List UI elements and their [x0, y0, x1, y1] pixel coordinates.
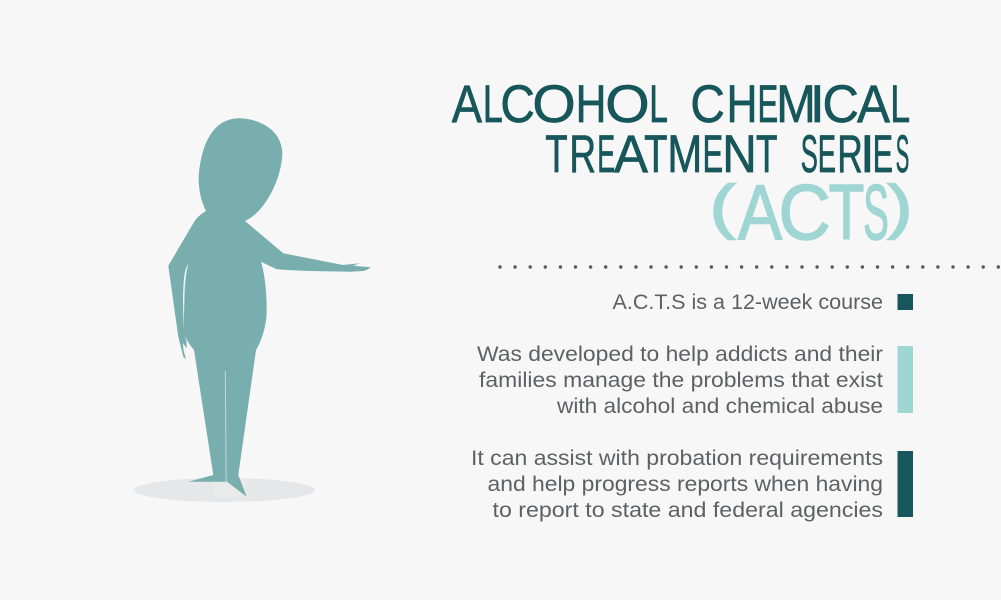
text: S: [896, 125, 909, 184]
item 3 text: to report to state and federal agencies: [492, 499, 883, 522]
title line 1: H: [576, 75, 606, 134]
title line 1: A: [857, 75, 891, 134]
title line 2: S: [801, 125, 818, 184]
person silhouette: [168, 118, 371, 497]
title line 1: L: [483, 75, 503, 134]
gap between legs: [224, 371, 227, 482]
title line 2: T: [644, 125, 668, 184]
title line 2: E: [873, 125, 893, 184]
title line 2: I: [860, 125, 875, 184]
item 2 text: with alcohol and chemical abuse: [556, 395, 883, 418]
item 3 text: It can assist with probation requirements: [471, 447, 883, 470]
title line 2: R: [569, 125, 596, 184]
title line 2: N: [722, 125, 757, 184]
item 2 text: [477, 343, 883, 418]
faint foot reflection: [213, 479, 247, 497]
title line 1: A: [452, 75, 483, 134]
title line 2: E: [818, 125, 836, 184]
title line 2: E: [702, 125, 723, 184]
title line 1: E: [758, 75, 778, 134]
dotted divider: [498, 265, 1000, 269]
ground shadow: [134, 478, 315, 502]
title line 1: I: [810, 75, 825, 134]
title line 1: [452, 75, 910, 134]
item 3 text: and help progress reports when having: [488, 473, 883, 496]
item 3: benefits: [471, 447, 913, 522]
figure with ground shadow: [134, 118, 371, 502]
item 1: course length: [612, 291, 913, 314]
acronym heading: (: [710, 173, 736, 240]
acronym heading: ): [888, 173, 912, 240]
title: [452, 75, 910, 184]
title line 1: L: [649, 75, 668, 134]
acronym heading: [710, 168, 912, 256]
acronym heading: A: [738, 168, 782, 256]
title line 1: O: [605, 75, 650, 134]
item 1 text: A.C.T.S is a 12-week course: [612, 291, 883, 314]
title line 1: L: [890, 75, 910, 134]
title line 1: H: [727, 75, 757, 134]
gap between arm and torso: [183, 264, 188, 330]
title line 2: M: [667, 125, 702, 184]
title line 1: M: [776, 75, 816, 134]
title line 2: T: [756, 125, 778, 184]
item 3 text: [471, 447, 883, 522]
title line 1: C: [690, 75, 725, 134]
title line 2: R: [837, 125, 863, 184]
title line 2: A: [614, 125, 649, 184]
title line 2: T: [545, 125, 568, 184]
title line 1: O: [532, 75, 576, 134]
item 2 text: Was developed to help addicts and their: [477, 343, 883, 366]
title line 1: C: [822, 75, 859, 134]
item 2: purpose: [477, 343, 913, 418]
acronym heading: T: [829, 168, 864, 256]
item 2 text: families manage the problems that exist: [479, 369, 883, 392]
title line 2: [545, 125, 909, 184]
title line 1: C: [500, 75, 535, 134]
acronym heading: C: [778, 168, 831, 256]
item 3 marker: [898, 451, 913, 517]
title line 2: E: [597, 125, 615, 184]
item 1 marker: [898, 294, 913, 310]
acronym heading: S: [863, 168, 889, 256]
item 2 marker: [898, 346, 913, 413]
